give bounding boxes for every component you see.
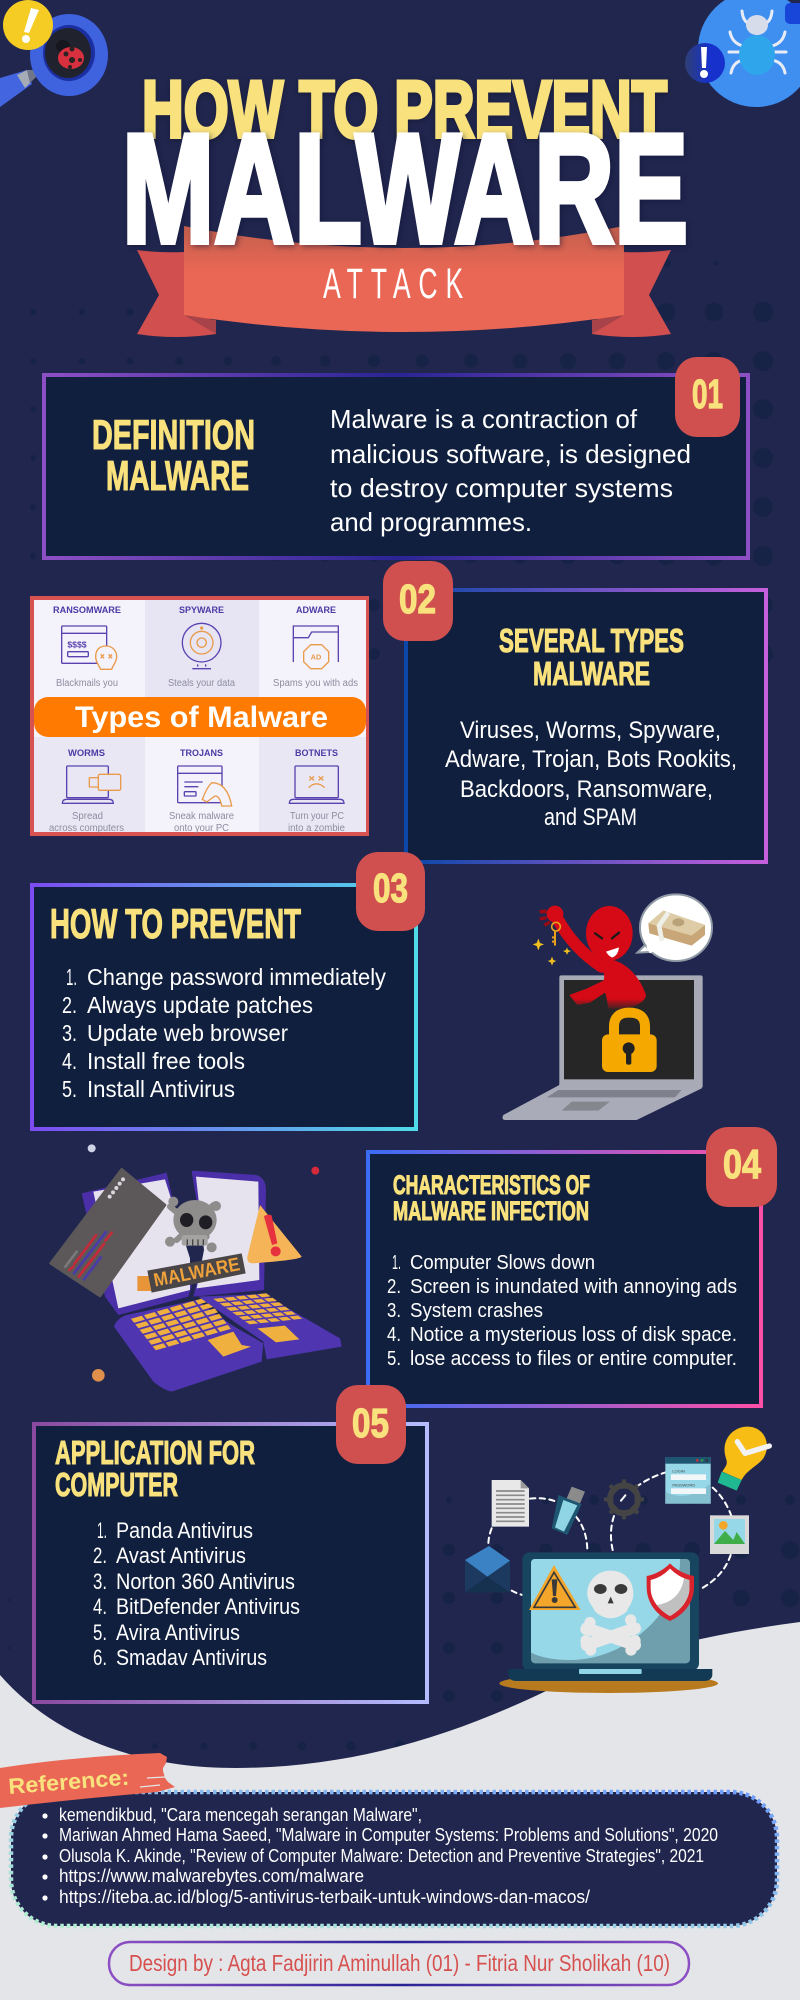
antivirus list: Norton 360 Antivirus (116, 1569, 295, 1594)
references list: Olusola K. Akinde, "Review of Computer Malware: Detection and Preventive Strategies", 2021 (59, 1846, 704, 1866)
antivirus list: Avira Antivirus (116, 1620, 240, 1645)
badge 02 (383, 561, 453, 641)
badge 03: 03 (373, 865, 408, 911)
icon: envelope (465, 1546, 510, 1592)
heading: application for computer: APPLICATION FOR (55, 1434, 255, 1471)
symptoms list: 5. (387, 1348, 401, 1370)
prevention list: 1. (66, 964, 77, 990)
prevention list: Change password immediately (87, 964, 386, 990)
types text (445, 717, 737, 831)
symptoms list: Screen is inundated with annoying ads (410, 1276, 737, 1298)
definition text (330, 404, 691, 537)
antivirus list: 5. (93, 1620, 107, 1645)
antivirus list: Avast Antivirus (116, 1543, 246, 1568)
icon: document (492, 1480, 529, 1527)
types text: Viruses, Worms, Spyware, (460, 717, 721, 744)
image panel: types of malware: into a zombie (288, 823, 345, 834)
icon: light bulb with check (718, 1427, 769, 1491)
image panel: types of malware: onto your PC (174, 823, 229, 834)
types text: Adware, Trojan, Bots Rookits, (445, 746, 737, 773)
prevention list: 5. (62, 1076, 77, 1102)
heading: definition malware: DEFINITION (92, 411, 255, 458)
icon: skull and crossbones (580, 1571, 641, 1656)
ribbon banner (137, 226, 671, 337)
ribbon text: attack: ATTACK (323, 260, 471, 308)
symptoms list: lose access to files or entire computer. (410, 1348, 737, 1370)
antivirus list: 2. (93, 1543, 107, 1568)
references list: kemendikbud, "Cara mencegah serangan Malware", (59, 1805, 422, 1825)
symptoms list: 3. (387, 1300, 401, 1322)
illustration: broken laptop with skull (51, 1144, 342, 1392)
image panel: types of malware (30, 596, 369, 836)
icon: gear (604, 1479, 644, 1519)
sign: malware: MALWARE (152, 1254, 242, 1292)
prevention list: Always update patches (87, 992, 313, 1018)
type icons: $$$$ (67, 639, 87, 649)
image panel: types of malware: Blackmails you (56, 678, 118, 689)
icon: blue alert badge (685, 43, 725, 83)
image panel: types of malware: ADWARE (296, 605, 336, 616)
type icons: AD (311, 652, 321, 661)
heading: how to prevent: HOW TO PREVENT (50, 900, 301, 947)
panel 02: several types (383, 561, 766, 862)
antivirus list: Smadav Antivirus (116, 1645, 267, 1670)
antivirus list: BitDefender Antivirus (116, 1594, 300, 1619)
icon: padlock (602, 1013, 657, 1072)
antivirus list: Panda Antivirus (116, 1518, 253, 1543)
image panel: types of malware: WORMS (68, 748, 105, 759)
types text: Backdoors, Ransomware, (460, 776, 713, 803)
antivirus list (93, 1518, 300, 1670)
credits pill (109, 1942, 689, 1985)
heading: characteristics of malware infection: CHARACTERISTICS OF (393, 1170, 590, 1200)
references list: https://iteba.ac.id/blog/5-antivirus-terbaik-untuk-windows-dan-macos/ (59, 1887, 590, 1907)
heading: several types malware: SEVERAL TYPES (499, 622, 684, 659)
icon: login window (665, 1457, 711, 1504)
icon: picture frame (710, 1515, 749, 1554)
antivirus list: 1. (97, 1518, 107, 1543)
heading: several types malware: MALWARE (533, 655, 650, 692)
symptoms list: Computer Slows down (410, 1252, 595, 1274)
reference brush label: Reference: (7, 1765, 130, 1799)
image panel: types of malware: Sneak malware (169, 811, 234, 822)
badge 02: 02 (399, 576, 436, 622)
icon: blue bug circle (685, 0, 800, 107)
antivirus list: 4. (93, 1594, 107, 1619)
references panel (11, 1792, 777, 1926)
image panel: types of malware: SPYWARE (179, 605, 224, 616)
definition text: malicious software, is designed (330, 439, 691, 469)
symptoms list: 1. (392, 1252, 401, 1274)
badge 05 (336, 1385, 406, 1464)
symptoms list: Notice a mysterious loss of disk space. (410, 1324, 737, 1346)
icon: magnifier with ladybug (0, 0, 108, 107)
light grey wave at page bottom (0, 1622, 800, 2000)
heading: characteristics of malware infection: MALWARE INFECTION (393, 1196, 589, 1226)
image panel: types of malware: across computers (49, 823, 124, 834)
reference brush label (0, 1753, 175, 1808)
icon: warning triangle (529, 1565, 581, 1610)
references list (42, 1805, 718, 1907)
symptoms list: System crashes (410, 1300, 543, 1322)
definition text: to destroy computer systems (330, 473, 673, 503)
type icons (62, 623, 344, 806)
definition text: Malware is a contraction of (330, 404, 638, 434)
illustration: hacker stealing from locked laptop (502, 894, 712, 1120)
symptoms list: 4. (387, 1324, 401, 1346)
prevention list: 2. (62, 992, 77, 1018)
panel 05: application for computer (34, 1385, 427, 1702)
badge 05: 05 (352, 1400, 389, 1446)
panel 03: how to prevent (32, 852, 425, 1129)
icon: shield (647, 1563, 694, 1621)
references list: https://www.malwarebytes.com/malware (59, 1866, 364, 1886)
panel 01: definition (44, 357, 748, 558)
image panel: types of malware: Turn your PC (290, 811, 344, 822)
antivirus list: 3. (93, 1569, 107, 1594)
heading: application for computer (55, 1434, 255, 1503)
types text: and SPAM (544, 804, 637, 831)
panel 04: characteristics (368, 1127, 777, 1406)
icon: yellow alert badge (3, 0, 53, 50)
image panel: types of malware: Spams you with ads (273, 678, 358, 689)
image panel: types of malware: TROJANS (180, 748, 223, 759)
prevention list (62, 964, 386, 1102)
icon: login window: LOGIN (672, 1469, 685, 1474)
icon: usb stick (552, 1487, 585, 1535)
prevention list: 4. (62, 1048, 77, 1074)
antivirus list: 6. (93, 1645, 107, 1670)
image panel: types of malware: Spread (72, 811, 103, 822)
prevention list: Update web browser (87, 1020, 288, 1046)
image panel: types of malware: RANSOMWARE (53, 605, 121, 616)
prevention list: 3. (62, 1020, 77, 1046)
heading: definition malware (92, 411, 255, 499)
orange band: types of malware (34, 697, 366, 737)
badge 01: 01 (692, 371, 723, 417)
speech bubble: money (637, 894, 712, 961)
prevention list: Install free tools (87, 1048, 245, 1074)
symptoms list (387, 1252, 737, 1370)
definition text: and programmes. (330, 507, 532, 537)
illustration: infected laptop with network icons (465, 1427, 769, 1693)
heading: characteristics of malware infection (393, 1170, 590, 1226)
heading: several types malware (499, 622, 684, 692)
icon: login window: PASSWORD (672, 1483, 695, 1488)
image panel: types of malware: Steals your data (168, 678, 235, 689)
references list: Mariwan Ahmed Hama Saeed, "Malware in Computer Systems: Problems and Solutions", 2020 (59, 1825, 718, 1845)
credits pill: Design by : Agta Fadjirin Aminullah (01) - Fitria Nur Sholikah (10) (129, 1950, 670, 1976)
heading: definition malware: MALWARE (106, 452, 249, 499)
badge 01 (675, 357, 740, 437)
image panel: types of malware: BOTNETS (295, 748, 338, 759)
orange band: types of malware: Types of Malware (75, 701, 328, 734)
badge 04 (706, 1127, 777, 1207)
symptoms list: 2. (387, 1276, 401, 1298)
badge 04: 04 (723, 1141, 761, 1187)
heading: application for computer: COMPUTER (55, 1466, 178, 1503)
badge 03 (356, 852, 425, 931)
prevention list: Install Antivirus (87, 1076, 235, 1102)
